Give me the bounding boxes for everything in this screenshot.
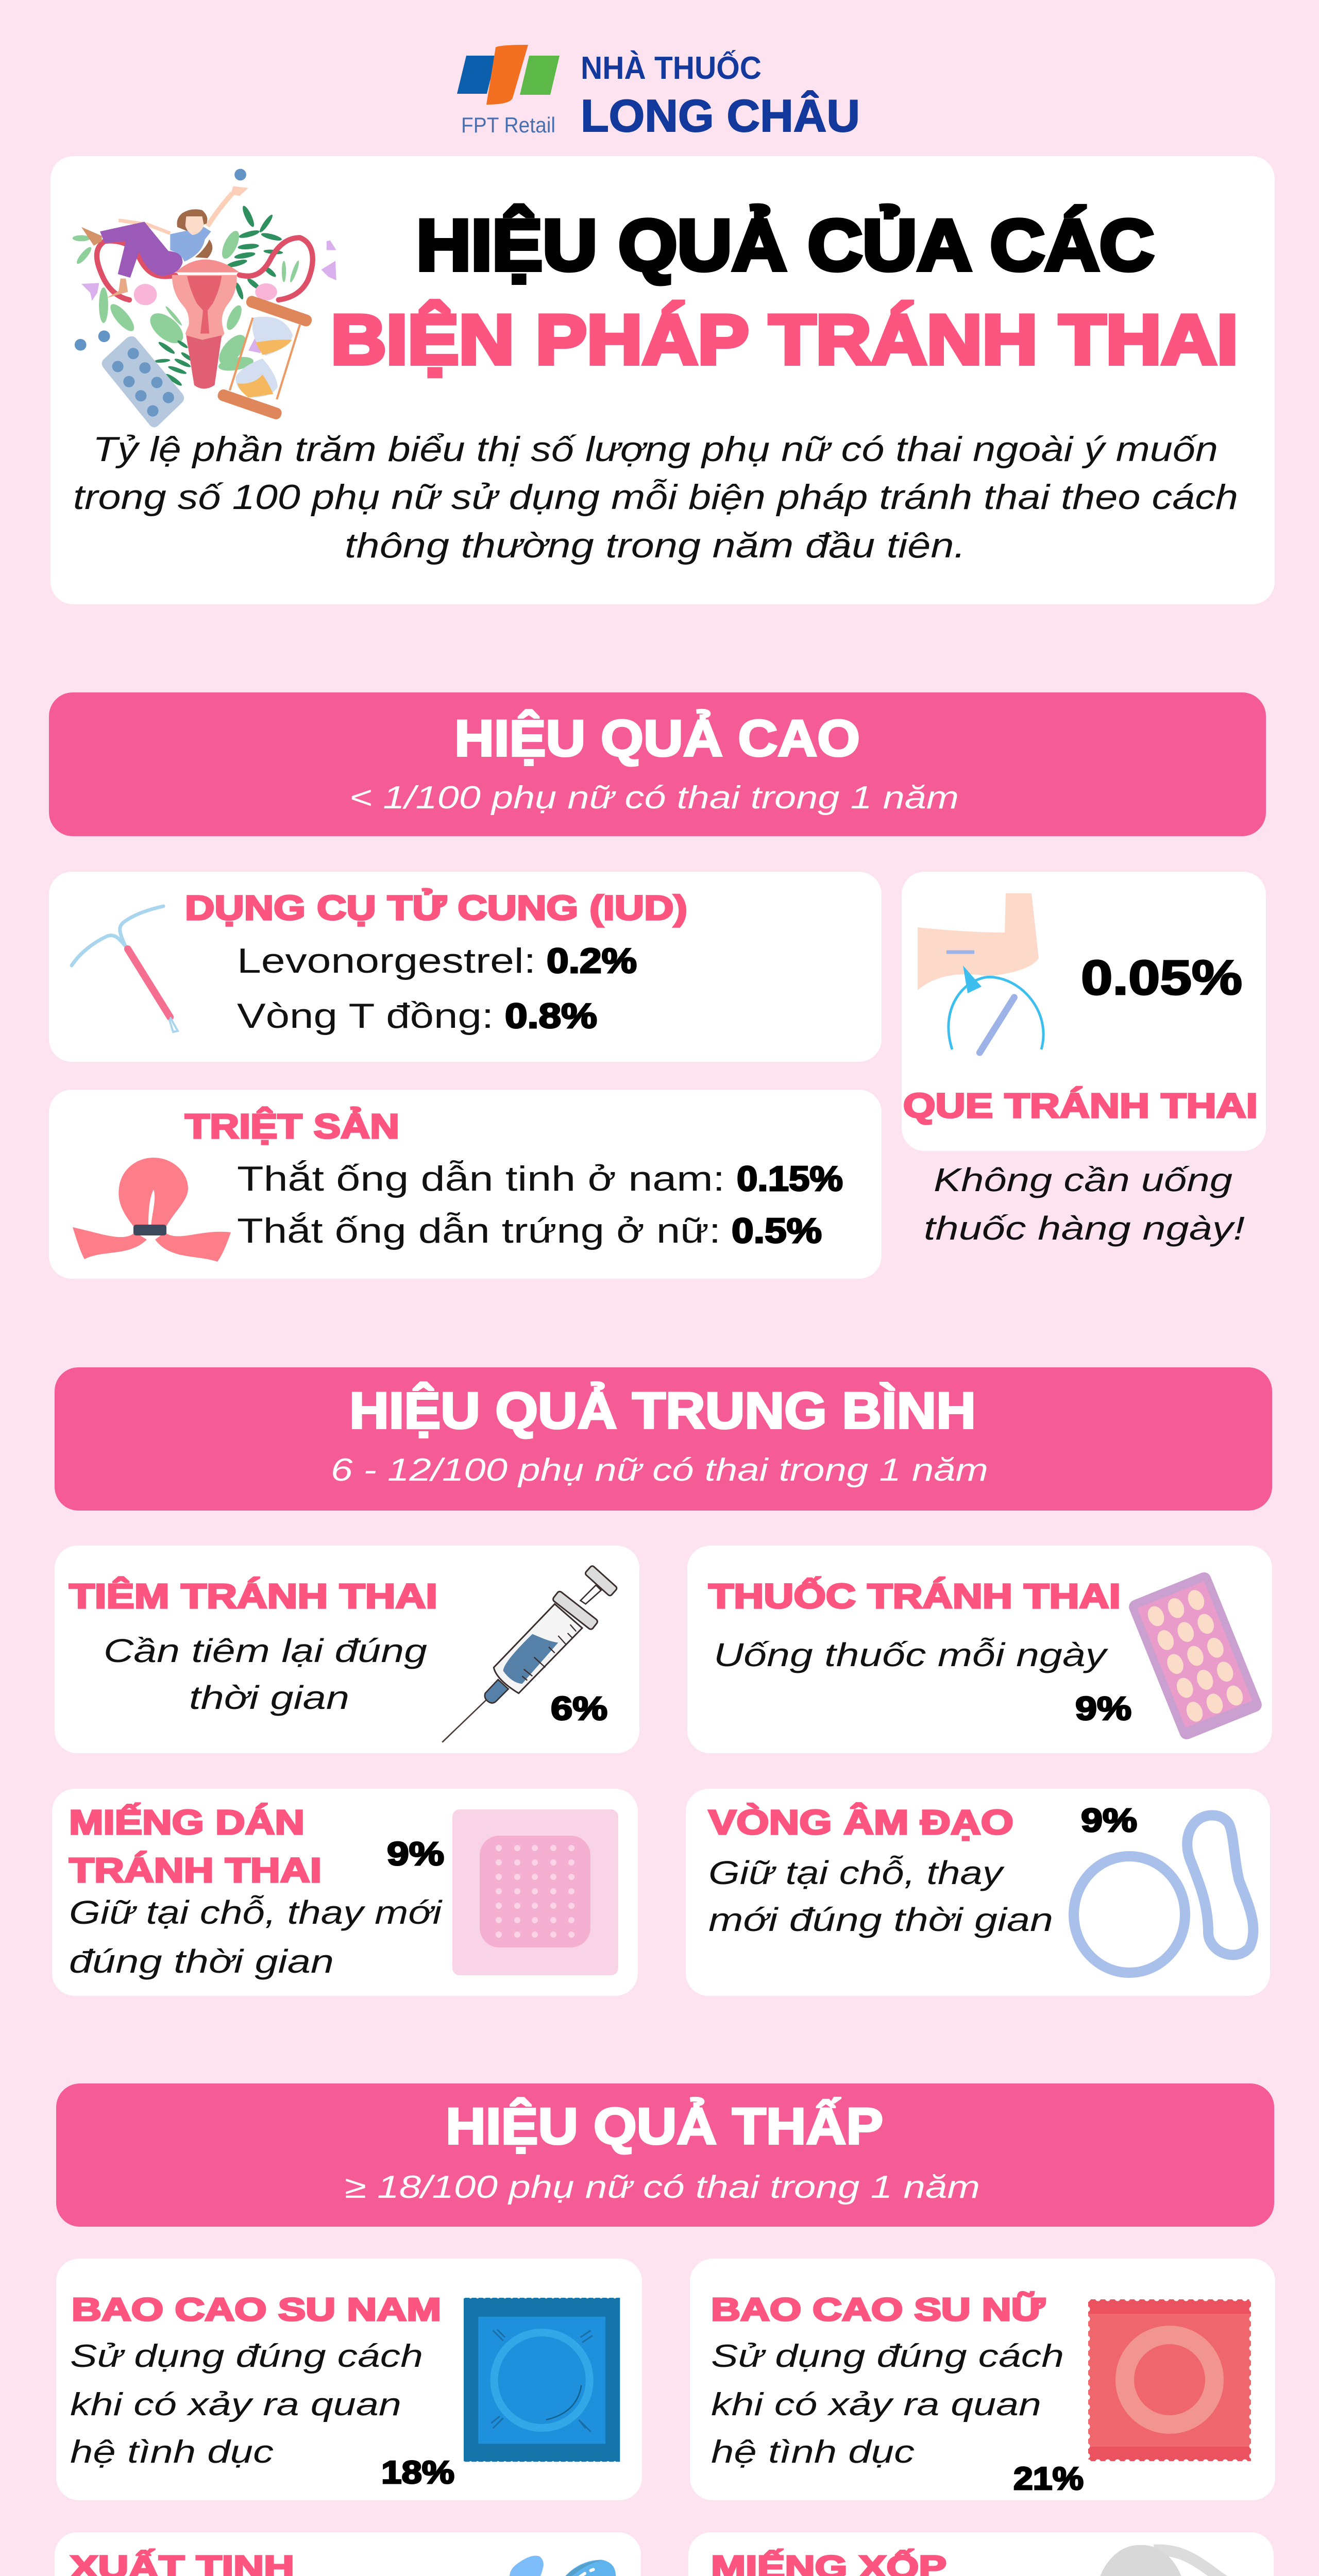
heading [69, 1803, 322, 1890]
heading: THUỐC TRÁNH THAI [708, 1577, 1121, 1616]
logo text: FPT Retail [461, 113, 555, 137]
description [104, 1632, 428, 1716]
panel: patch [52, 1789, 638, 1996]
description: hệ tình dục [711, 2434, 915, 2470]
title: HIỆU QUẢ CỦA CÁC [416, 205, 1154, 285]
description: Giữ tại chỗ, thay mới [69, 1894, 443, 1931]
section banner: low effectiveness: ≥ 18/100 phụ nữ có thai trong 1 năm [345, 2170, 980, 2205]
value: 9% [1075, 1690, 1131, 1727]
description [708, 1854, 1053, 1938]
title [331, 205, 1238, 379]
intro description: Tỷ lệ phần trăm biểu thị số lượng phụ nữ có thai ngoài ý muốn [93, 430, 1218, 469]
section banner: high effectiveness: HIỆU QUẢ CAO [454, 709, 860, 767]
icon: sperm [469, 2556, 616, 2576]
rates: Vòng T đồng: [237, 996, 494, 1036]
panel: withdrawal [55, 2532, 641, 2576]
panel: injection [55, 1546, 639, 1753]
icon: pill pack [1127, 1570, 1264, 1741]
heading: TIÊM TRÁNH THAI [69, 1577, 437, 1616]
heading: BAO CAO SU NAM [72, 2292, 441, 2328]
description: Giữ tại chỗ, thay [708, 1854, 1005, 1891]
panel: vaginal ring [686, 1789, 1270, 1996]
description: khi có xảy ra quan [70, 2387, 401, 2422]
icon: rings [1074, 1815, 1253, 1973]
rates: 0.8% [505, 996, 597, 1036]
description: khi có xảy ra quan [711, 2387, 1041, 2422]
rates [237, 941, 637, 1036]
value: 21% [1013, 2461, 1084, 2497]
description [70, 2338, 423, 2470]
value: 9% [387, 1835, 444, 1872]
section banner: medium effectiveness: 6 - 12/100 phụ nữ có thai trong 1 năm [331, 1452, 988, 1488]
section banner: low effectiveness: HIỆU QUẢ THẤP [446, 2097, 883, 2155]
heading: TRIỆT SẢN [185, 1107, 399, 1146]
panel: IUD [49, 872, 882, 1062]
description: thời gian [189, 1679, 349, 1716]
panel: sterilization [49, 1090, 882, 1279]
section banner: medium effectiveness [55, 1367, 1272, 1511]
icon: arm implant [918, 893, 1043, 1053]
heading: BAO CAO SU NỮ [711, 2292, 1045, 2328]
value: 6% [551, 1690, 607, 1727]
description: Sử dụng đúng cách [711, 2338, 1064, 2374]
logo text: NHÀ THUỐC [581, 50, 762, 86]
heading: DỤNG CỤ TỬ CUNG (IUD) [185, 889, 687, 927]
rates: 0.2% [547, 941, 637, 980]
heading: TRÁNH THAI [69, 1851, 322, 1890]
heading: VÒNG ÂM ĐẠO [708, 1803, 1013, 1842]
logo text [461, 50, 860, 141]
description: Uống thuốc mỗi ngày [714, 1636, 1109, 1673]
rates: 0.15% [737, 1159, 843, 1198]
intro description [73, 430, 1238, 565]
illustration: woman, uterus, hourglass and pills [73, 169, 336, 427]
rates: 0.5% [732, 1211, 822, 1250]
section banner: medium effectiveness: HIỆU QUẢ TRUNG BÌNH [349, 1382, 976, 1439]
value: 0.05% [1081, 951, 1242, 1005]
panel: sponge [688, 2532, 1274, 2576]
description: Cần tiêm lại đúng [104, 1632, 428, 1669]
description: đúng thời gian [69, 1943, 334, 1980]
section banner: high effectiveness: < 1/100 phụ nữ có thai trong 1 năm [349, 780, 959, 816]
rates: Thắt ống dẫn tinh ở nam: [237, 1159, 725, 1198]
rates [237, 1159, 843, 1250]
icon: sponge [1095, 2545, 1242, 2576]
section banner: low effectiveness [56, 2083, 1274, 2227]
panel: female condom [690, 2259, 1275, 2500]
heading: MIẾNG DÁN [69, 1803, 305, 1842]
description [711, 2338, 1064, 2470]
icon: IUD [72, 906, 178, 1032]
note: implant [924, 1161, 1245, 1247]
rates: Levonorgestrel: [237, 941, 536, 980]
rates: Thắt ống dẫn trứng ở nữ: [237, 1211, 721, 1250]
icon: tied tube [73, 1158, 231, 1262]
note: implant: Không cần uống [934, 1161, 1233, 1198]
panel: pills [687, 1546, 1272, 1753]
intro description: thông thường trong năm đầu tiên. [345, 526, 966, 565]
icon: red condom [1087, 2298, 1252, 2462]
icon: FPT mark [457, 45, 560, 105]
value: 9% [1081, 1802, 1137, 1839]
panel: male condom [56, 2259, 642, 2500]
icon: blue condom [464, 2297, 620, 2463]
description [69, 1894, 443, 1980]
description: hệ tình dục [70, 2434, 274, 2470]
logo text: LONG CHÂU [581, 90, 860, 141]
section banner: high effectiveness [49, 692, 1266, 836]
description: mới đúng thời gian [708, 1901, 1053, 1938]
panel: implant [902, 872, 1266, 1151]
title: BIỆN PHÁP TRÁNH THAI [331, 300, 1238, 379]
description: Sử dụng đúng cách [70, 2338, 423, 2374]
note: implant: thuốc hàng ngày! [924, 1210, 1245, 1247]
intro description: trong số 100 phụ nữ sử dụng mỗi biện pháp tránh thai theo cách [73, 478, 1238, 517]
logo: Nhà thuốc Long Châu [457, 45, 860, 141]
icon: syringe [442, 1565, 618, 1742]
heading: QUE TRÁNH THAI [903, 1087, 1258, 1125]
icon: patch [452, 1809, 618, 1975]
value: 18% [381, 2455, 454, 2490]
panel: intro [50, 156, 1275, 604]
